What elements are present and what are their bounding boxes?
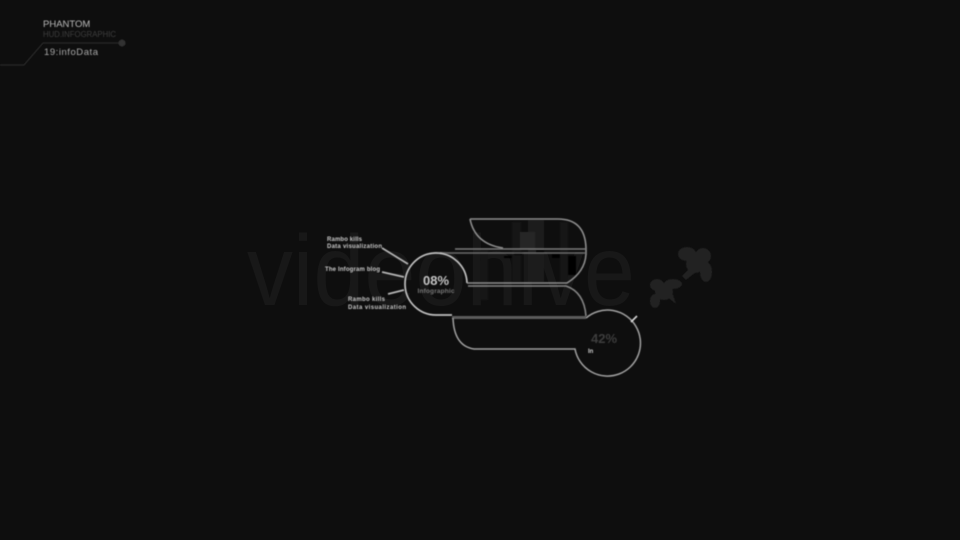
header block	[0, 19, 126, 65]
watermark wordmark: videohive	[247, 215, 635, 327]
icon: watermark leaf logo	[650, 247, 712, 308]
08% value: 08%	[423, 273, 449, 288]
08% caption: Infographic	[418, 288, 455, 295]
callout labels: Data visualization	[327, 244, 382, 250]
callout labels: The Infogram blog	[325, 267, 380, 273]
lower capsule with 42% ring	[453, 310, 640, 376]
header title: PHANTOM	[43, 19, 90, 30]
42% label: 42%	[591, 331, 617, 346]
top capsule outline	[440, 219, 586, 283]
header data label: 19:infoData	[44, 47, 99, 58]
callout labels	[325, 237, 406, 311]
callout labels: Data visualization	[348, 305, 406, 311]
glitch artefacts	[480, 220, 576, 300]
middle capsule outline	[452, 286, 586, 319]
ring tick	[631, 316, 637, 322]
42% label: In	[588, 349, 594, 355]
42% label	[588, 331, 617, 355]
08% ring	[405, 253, 467, 315]
callout labels: Rambo kills	[348, 297, 386, 303]
callout labels: Rambo kills	[327, 237, 363, 243]
header subtitle: HUD.INFOGRAPHIC	[43, 29, 116, 39]
header connector line	[0, 40, 126, 65]
callout connector lines	[382, 248, 408, 294]
